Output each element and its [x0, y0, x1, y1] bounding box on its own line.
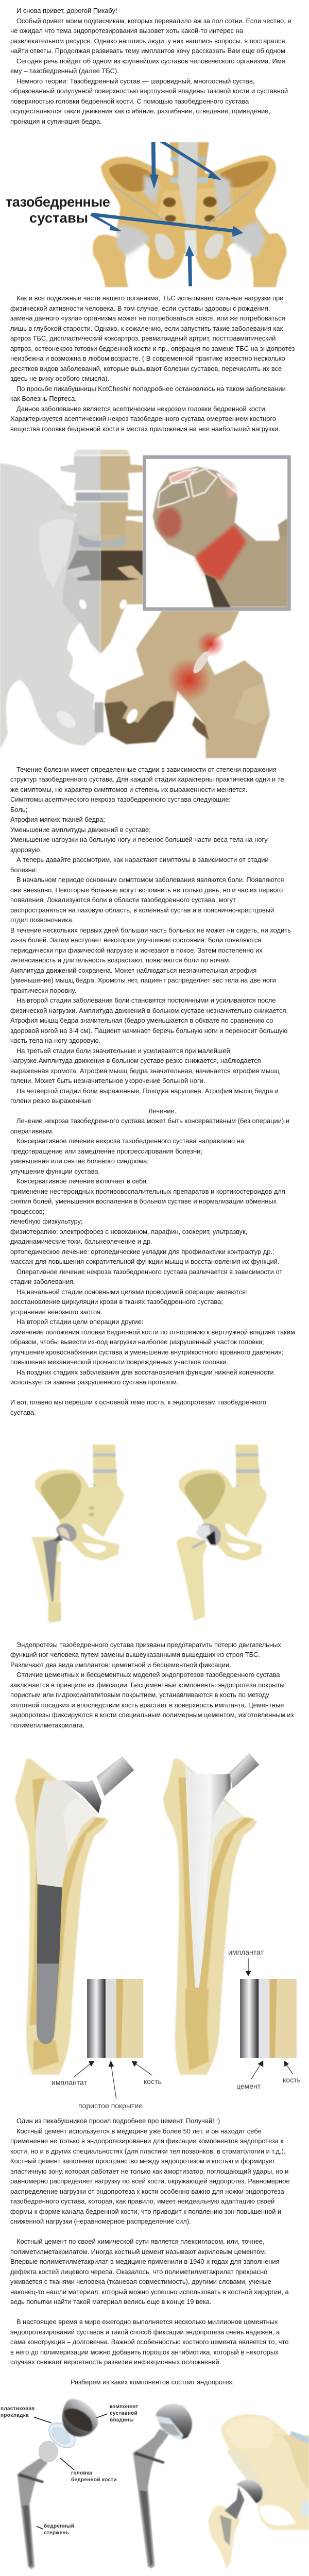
text block: stages, symptoms and treatment: (уменьшение) мышц бедра. Хромоты нет, пациент распределяет вес тела на две ноги: [10, 976, 276, 984]
femur and pubis in tan: [105, 611, 270, 758]
text block: introduction: Сегодня речь пойдёт об одном из крупнейших суставов человеческого организма. Имя: [16, 57, 285, 65]
text block: bone cement: [10, 2117, 290, 2386]
text block: stages, symptoms and treatment: оперативным.: [10, 1127, 54, 1134]
blue arrows: [90, 142, 244, 286]
label: cement: цемент: [236, 2082, 261, 2090]
label: femoral stem: бедренный: [44, 2523, 74, 2529]
inset panel: damaged femoral head: [144, 457, 289, 609]
text block: bone cement: сама конструкция – долговечна. Важной особенностью костного цемента является то, что: [10, 2338, 288, 2346]
label: femoral head: бедренной кости: [71, 2477, 117, 2483]
text block: types of implants: заключается в принципе их фиксации. Бесцементные компоненты эндопротеза покрыты: [10, 1681, 285, 1689]
text block: stages, symptoms and treatment: Лечение.: [148, 1107, 176, 1115]
left metal stem: [43, 1537, 63, 1602]
femoral stem exploded: [18, 2457, 47, 2569]
text block: bone cement: сниженной нагрузки (неравномерное распределение сил).: [10, 2217, 191, 2225]
plastic liner: [45, 2418, 79, 2453]
text block: stages, symptoms and treatment: болезни:: [10, 866, 37, 874]
text block: stages, symptoms and treatment: распространяться на паховую область, в коленный сустав и в пояснично-крестцовый: [10, 906, 274, 914]
text block: stages, symptoms and treatment: Амплитуда движений сохранена. Может наблюдаться незначительная атрофия: [10, 967, 256, 974]
text block: introduction: осуществляются такие движения как сгибание, разгибание, отведение, приведение,: [10, 107, 270, 115]
text block: stages, symptoms and treatment: В течение нескольких первых дней большая часть больных не может ни сидеть, ни ходить: [10, 926, 291, 934]
text block: introduction: [10, 7, 291, 125]
text block: stages, symptoms and treatment: [10, 766, 295, 1416]
text block: introduction: пронация и супинация бедра.: [10, 117, 102, 125]
trunnion: [97, 1756, 134, 1796]
label: bone right: кость: [283, 2076, 301, 2084]
text block: diseases of the hip joint: как Болезнь Пертеса.: [10, 395, 77, 402]
text block: stages, symptoms and treatment: сустава.: [10, 1409, 36, 1416]
text block: stages, symptoms and treatment: Уменьшение нагрузки на больную ногу и перенос большей части веса тела на ногу: [10, 836, 268, 843]
pointer arrows: [74, 1958, 293, 2099]
right hip with cup and ball: [176, 1445, 267, 1621]
text block: types of implants: «плотной посадки» и впоследствии кость врастает в поверхность импланта. Цементные: [10, 1701, 284, 1709]
inset bone: [153, 467, 287, 607]
text block: stages, symptoms and treatment: Уменьшение амплитуды движений в суставе;: [10, 825, 151, 834]
label: implant: имплантат: [52, 2078, 87, 2087]
text block: introduction: ему – тазобедренный (далее ТБС).: [10, 67, 119, 75]
text block: types of implants: Отличие цементных и бесцементных моделей эндопротезов тазобедренного сустава: [16, 1671, 280, 1679]
text block: stages, symptoms and treatment: предотвращение или замедление прогрессирования болезни;: [10, 1147, 202, 1155]
text block: stages, symptoms and treatment: улучшение функции сустава.: [10, 1167, 100, 1175]
red inflammation on femoral neck: [167, 631, 225, 701]
illustration: endoprosthesis components: [1, 2398, 309, 2570]
text block: stages, symptoms and treatment: Оперативное лечение некроза тазобедренного сустава различается в зависимости от: [16, 1267, 282, 1276]
text block: stages, symptoms and treatment: Боль;: [10, 806, 27, 813]
text block: stages, symptoms and treatment: На поздних стадиях заболевания для восстановления функции нижней конечности: [16, 1368, 274, 1376]
text block: bone cement: Костный цемент по своей химической сути является плексигласом, или, точнее,: [16, 2238, 265, 2245]
text block: stages, symptoms and treatment: периодически при физической нагрузке и исчезают в покое. Затем постепенно их: [10, 946, 263, 954]
text block: introduction: развлекательном ресурсе. Однако нашлись люди, у них нашлись вопросы, я постарался: [10, 37, 285, 44]
text block: bone cement: уживается с тканями человека (тканевая совместимость), другими словами, ученые: [10, 2278, 271, 2285]
label: plastic liner: [1, 2406, 35, 2418]
text block: diseases of the hip joint: артроз ТБС, диспластический коксартроз, ревматоидный артрит, посттравматический: [10, 334, 276, 342]
right femur: [176, 1537, 207, 1621]
text block: stages, symptoms and treatment: здоровую.: [10, 846, 42, 853]
left cancellous layers: [29, 1777, 107, 2071]
left femur section: [31, 1537, 61, 1623]
text block: introduction: Особый привет моим подписчикам, которых перевалило аж за пол сотни. Если честно, я: [16, 16, 291, 25]
illustration: cementless and cemented stems: [14, 1753, 301, 2110]
text block: bone cement: формы к форме канала бедренной кости, что приводит к появлению зон повышенной и: [10, 2208, 281, 2215]
text block: diseases of the hip joint: [10, 294, 295, 433]
text block: stages, symptoms and treatment: применение нестероидных противовоспалительных препаратов и кортикостероидов для: [10, 1187, 285, 1195]
text block: diseases of the hip joint: замена данного «узла» организма может не потребоваться вовсе, или же потребоваться: [10, 314, 285, 322]
text block: diseases of the hip joint: неизбежна и возможна в любом возрасте. ( В современной практике известно несколько: [10, 354, 285, 362]
text block: stages, symptoms and treatment: образом, чтобы вывести из-под нагрузки наиболее разрушенный участок головки;: [10, 1338, 264, 1346]
label: femoral head: головка: [71, 2470, 92, 2476]
text block: introduction: И снова привет, дорогой Пикабу!: [16, 7, 117, 14]
inset cracked fragments: [158, 469, 235, 507]
right pelvis: [179, 1469, 267, 1561]
left pelvis: [35, 1469, 124, 1561]
text block: stages, symptoms and treatment: устранение венозного застоя.: [10, 1308, 102, 1316]
illustration: two hips with endoprostheses: [31, 1444, 268, 1624]
text block: stages, symptoms and treatment: Лечение некроза тазобедренного сустава может быть консервативным (без операции) и: [16, 1117, 289, 1125]
text block: types of implants: Различают два вида имплантов: цементной и бесцементной фиксации.: [10, 1661, 231, 1669]
text block: bone cement: Разберем из каких компонентов состоит эндопротез:: [71, 2378, 234, 2386]
pelvis bone: [101, 156, 276, 280]
text block: introduction: Немного теории: Тазобедренный сустав — шаровидный, многоосный сустав,: [16, 77, 254, 84]
text block: bone cement: распределение нагрузки от эндопротеза к кости особенно важно для ножки эндопротеза: [10, 2188, 284, 2195]
text block: bone cement: равномерно распределяет нагрузку по всей кости, окружающей эндопротез. Равномерное: [10, 2177, 290, 2185]
text block: bone cement: Впервые полиметилметакрилат в медицине применили в 1940-х годах для заполнения: [10, 2258, 279, 2265]
text block: stages, symptoms and treatment: ортопедическое лечение: ортопедические укладки для профилактики контрактур др.;: [10, 1248, 274, 1255]
joint capsules and ligaments: [116, 172, 265, 258]
text block: bone cement: кости, но и в других специальностях (для пластики тел позвонков, в стоматологии и т.д.).: [10, 2147, 285, 2155]
label: femoral head: [71, 2470, 117, 2483]
left hip with cut femur and cemented stem: [31, 1445, 124, 1623]
text block: bone cement: наконец-то нашли материал, который можно успешно использовать в костной хирургии, а: [10, 2288, 289, 2296]
text block: diseases of the hip joint: десятков видов заболеваний, которые вызывают болезни суставов, перечислять их все: [10, 365, 282, 372]
detail: cementless interface: [87, 1979, 143, 2058]
text block: stages, symptoms and treatment: улучшение кровоснабжения сустава и уменьшение внутрикостного кровяного давления;: [10, 1348, 283, 1356]
text block: diseases of the hip joint: Данное заболевание является асептическим некрозом головки бедренной кости.: [16, 405, 267, 412]
right spine: [235, 1445, 260, 1492]
left acetabular cup: [56, 1523, 77, 1541]
text block: stages, symptoms and treatment: практически поровну.: [10, 986, 76, 994]
label: implant top: имплантат: [228, 1948, 264, 1956]
spine with central ligament: [169, 142, 209, 224]
right cancellous layers: [178, 1777, 254, 2071]
cemented femur: [163, 1753, 259, 2075]
text block: types of implants: функций ног человека путем замены вышеуказанными вышедших из строя ТБС.: [10, 1651, 260, 1658]
text block: types of implants: эндопротезы фиксируются в кости специальным полимерным цементом, изготовленным из: [10, 1711, 294, 1719]
text block: types of implants: Эндопротезы тазобедренного сустава призваны предотвратить потерю двигательных: [16, 1641, 281, 1649]
acetabular component: [54, 2393, 103, 2445]
collar and neck: [62, 1780, 101, 1813]
porous coating: [36, 1780, 97, 1887]
text block: stages, symptoms and treatment: изменение положения головки бедренной кости по отношению к вертлужной впадине таким: [10, 1328, 295, 1335]
detail: cemented interface: [240, 1979, 297, 2058]
text block: stages, symptoms and treatment: же симптомы, но характер симптомов и степень их выраженности меняется.: [10, 785, 247, 793]
trunnion: [230, 1753, 259, 1788]
text block: bone cement: В настоящее время в мире ежегодно выполняется несколько миллионов цементных: [16, 2318, 278, 2326]
text block: bone cement: эндопротезирований суставов и такой способ фиксации эндопротеза очень надежен, а: [10, 2328, 280, 2336]
text block: bone cement: тазобедренного сустава, которая, как правило, имеет неидеальную адаптацию своей: [10, 2197, 274, 2205]
text block: bone cement: Один из пикабушников просил подробнее про цемент. Получай! :): [16, 2117, 220, 2125]
text block: stages, symptoms and treatment: процессов;: [10, 1208, 44, 1215]
text block: stages, symptoms and treatment: физиотерапию: электрофорез с новокаином, парафин, озокерит, ультразвук,: [10, 1227, 247, 1235]
implanted pelvis and femur: [208, 2414, 309, 2569]
text block: stages, symptoms and treatment: восстановление циркуляции крови в тканях тазобедренного сустава;: [10, 1298, 223, 1306]
femurs: [93, 233, 286, 287]
text block: types of implants: [10, 1641, 294, 1729]
cement mantle: [185, 1766, 244, 1988]
label: acetabular component: [110, 2404, 139, 2423]
text block: bone cement: дефекта костей лицевого черепа. Оказалось, что полиметилметакрилат прекрасно: [10, 2268, 267, 2276]
sacral foramina: [163, 197, 217, 222]
text block: bone cement: эластичную зону, которая работает не только как амортизатор, поглощающий удары, но и: [10, 2167, 288, 2175]
label: acetabular component: впадины: [110, 2417, 134, 2423]
inset red zone: [158, 484, 246, 581]
text block: stages, symptoms and treatment: голени резко выраженные: [10, 1097, 91, 1105]
illustration: necrosis of the femoral head: [0, 449, 291, 758]
text block: diseases of the hip joint: вещества головки бедренной кости в местах приложения на нее наибольшей нагрузки.: [10, 425, 280, 433]
label: hip joints: суставы: [29, 210, 88, 226]
dark stem section: [37, 1884, 62, 1964]
text block: stages, symptoms and treatment: уменьшение или снятие болевого синдрома;: [10, 1157, 149, 1165]
label: bone: кость: [144, 2077, 162, 2086]
label: plastic liner: пластиковая: [1, 2406, 35, 2412]
text block: stages, symptoms and treatment: Атрофия мышц бедра значительная (бедро уменьшается в обхвате по сравнению со: [10, 1016, 273, 1024]
text block: stages, symptoms and treatment: выраженная хромота. Атрофия мышц бедра значительная, начинается атрофия мышц: [10, 1066, 280, 1075]
text block: stages, symptoms and treatment: они внезапно. Некоторые больные могут вспомнить не только день, но и час их первого: [10, 886, 283, 893]
text block: stages, symptoms and treatment: Атрофия мягких тканей бедра;: [10, 816, 105, 823]
text block: stages, symptoms and treatment: стадии заболевания.: [10, 1278, 75, 1285]
text block: stages, symptoms and treatment: На второй стадии заболевания боли становятся постоянными и усиливаются после: [16, 996, 276, 1004]
lumbar vertebrae, split grey and tan: [60, 450, 143, 547]
text block: types of implants: полиметилметакрилата.: [10, 1721, 84, 1729]
label: hip joints: тазобедренные: [6, 194, 110, 210]
text block: diseases of the hip joint: Характеризуется асептический некроз тазобедренного сустава омертвением костного: [10, 415, 276, 422]
right chrome cup: [197, 1523, 221, 1546]
text block: stages, symptoms and treatment: И вот, плавно мы перешли к основной теме поста, к эндопротезам тазобедренного: [10, 1398, 266, 1406]
left spine: [93, 1445, 117, 1492]
text block: bone cement: полиметилметакрилатом. Иногда костный цемент называют акриловым цементом.: [10, 2248, 267, 2256]
text block: introduction: не ожидал что тема эндопротезирования вызовет хоть какой-то интерес на: [10, 27, 243, 35]
label: porous coating: пористое покрытие: [78, 2102, 143, 2110]
text block: stages, symptoms and treatment: структур тазобедренного сустава. Для каждой стадии характерны практически одни и те: [10, 775, 284, 783]
label: acetabular component: компонент: [110, 2404, 139, 2410]
text block: stages, symptoms and treatment: Течение болезни имеет определенные стадии в зависимости от степени поражения: [16, 766, 277, 773]
text block: bone cement: применение не только в эндопротезировании для фиксации компонентов эндопротеза к: [10, 2137, 283, 2145]
text block: bone cement: в него до полимеризации можно добавить порошок антибиотика, который в некоторых: [10, 2348, 279, 2356]
text block: stages, symptoms and treatment: лечебную физкультуру;: [10, 1217, 82, 1225]
grey pubic symphysis: [95, 702, 104, 732]
text block: stages, symptoms and treatment: А теперь давайте рассмотрим, как нарастают симптомы в зависимости от стадии: [16, 856, 269, 863]
inguinal ligament lines: [110, 181, 264, 226]
right bone: [163, 1758, 257, 2075]
text block: stages, symptoms and treatment: В начальном периоде основным симптомом заболевания являются боли. Появляются: [16, 876, 284, 884]
text block: diseases of the hip joint: артроз, остеонекроз готовки бедренной кости и пр., операция по замене ТБС на эндопротез: [10, 344, 295, 352]
text block: stages, symptoms and treatment: интенсивность и длительность возрастают, появляются боли по ночам.: [10, 956, 231, 964]
label: acetabular component: суставной: [110, 2411, 138, 2416]
text block: stages, symptoms and treatment: из-за болей. Затем наступает некоторое улучшение состояния: боли появляются: [10, 936, 261, 944]
text block: stages, symptoms and treatment: Консервативное лечение некроза тазобедренного сустава направлено на:: [16, 1137, 246, 1145]
polished stem: [189, 1773, 231, 1985]
text block: stages, symptoms and treatment: снятия болей, уменьшения воспаления в больном суставе и нормализации обменных: [10, 1197, 277, 1205]
text block: stages, symptoms and treatment: нагрузке.Амплитуда движения в больном суставе резко снижается, наблюдается: [10, 1057, 261, 1064]
lower stem section: [37, 1964, 59, 2044]
text block: stages, symptoms and treatment: физической нагрузки. Амплитуда движений в больном суставе незначительно снижается.: [10, 1007, 288, 1014]
text block: stages, symptoms and treatment: Консервативное лечение включает в себя:: [16, 1177, 148, 1185]
text block: stages, symptoms and treatment: На четвертой стадии боли выраженные. Походка нарушена. Атрофия мышц бедра и: [16, 1087, 279, 1094]
text block: bone cement: ведь попытки найти такой материал велись еще в конце 19 века.: [10, 2298, 212, 2306]
text block: diseases of the hip joint: здесь не вижу особого смысла).: [10, 375, 109, 382]
illustration: pelvis with hip joints: [6, 142, 287, 287]
text block: diseases of the hip joint: лишь в глубокой старости. Однако, к сожалению, если запустить такие заболевания как: [10, 325, 283, 332]
obturator foramina: [155, 230, 224, 260]
text block: stages, symptoms and treatment: На второй стадии цели операции другие:: [16, 1318, 144, 1326]
text block: stages, symptoms and treatment: здоровой ногой на 3-4 см). Пациент начинает беречь больную ноги и переносит большую: [10, 1026, 287, 1035]
text block: introduction: образованный полулунной поверхностью вертлужной впадины тазовой кости и суставной: [10, 87, 288, 95]
text block: stages, symptoms and treatment: Симптомы асептического некроза тазобедренного сустава следующие:: [10, 795, 231, 803]
assembled prosthesis: [133, 2404, 192, 2568]
text block: stages, symptoms and treatment: На начальной стадии основными целями проводимой операции являются:: [16, 1288, 248, 1295]
femoral head: [39, 2441, 58, 2462]
label: femoral stem: [44, 2523, 74, 2536]
text block: types of implants: пористым или гидроксиапатитовым покрытием, устанавливаются в кость по методу: [10, 1691, 269, 1699]
text block: stages, symptoms and treatment: отдел позвоночника.: [10, 916, 74, 924]
text block: stages, symptoms and treatment: голени. Может быть незначительное укорочение больной ноги.: [10, 1077, 205, 1084]
label: femoral stem: стержень: [44, 2530, 69, 2536]
text block: stages, symptoms and treatment: На третьей стадии боли значительные и усиливаются при малейшей: [16, 1047, 230, 1054]
label: plastic liner: прокладка: [1, 2413, 29, 2418]
text block: stages, symptoms and treatment: диадинамические токи, бальнеолечение и др.: [10, 1238, 152, 1245]
component arrows: [34, 2414, 108, 2529]
text block: stages, symptoms and treatment: используется замена разрушенного сустава протезом.: [10, 1378, 179, 1386]
left bone: [15, 1758, 108, 2075]
grey hip bone: [0, 463, 102, 750]
text block: diseases of the hip joint: По просьбе пикабушницы KotCheshir поподробнее остановлюсь на таком заболевании: [16, 384, 286, 393]
tan sacrum right half: [100, 520, 143, 654]
text block: bone cement: Костный цемент заполняет пространство между эндопротезом и костью и формирует: [10, 2157, 275, 2165]
label: hip joints: [6, 194, 110, 226]
text block: stages, symptoms and treatment: массаж для повышения сократительной функции мышц и восстановления их функций.: [10, 1258, 280, 1265]
cementless femur: [15, 1756, 134, 2075]
text block: stages, symptoms and treatment: повышение механической прочности поврежденных участков головки.: [10, 1358, 228, 1366]
text block: stages, symptoms and treatment: появления. Локализуются боли в области тазобедренного сустава, могут: [10, 896, 236, 904]
text block: bone cement: Костный цемент используется в медицине уже более 50 лет, и он находит себе: [16, 2127, 262, 2135]
text block: bone cement: случаях снижает вероятность развития инфекционных осложнений.: [10, 2358, 221, 2366]
grey sacrum left half: [63, 520, 128, 654]
text block: diseases of the hip joint: Как и все подвижные части нашего организма, ТБС испытывает сильные нагрузки при: [16, 294, 284, 302]
text block: introduction: поверхностью головки бедренной кости. С помощью тазобедренного сустава: [10, 97, 249, 105]
text block: diseases of the hip joint: физической активности человека. В том случае, если суставы здоровы с рождения,: [10, 304, 270, 312]
text block: introduction: найти ответы. Продолжая развивать тему имплантов хочу рассказать Вам еще об одном.: [10, 47, 287, 55]
text block: stages, symptoms and treatment: часть тела на ногу здоровую.: [10, 1037, 100, 1044]
